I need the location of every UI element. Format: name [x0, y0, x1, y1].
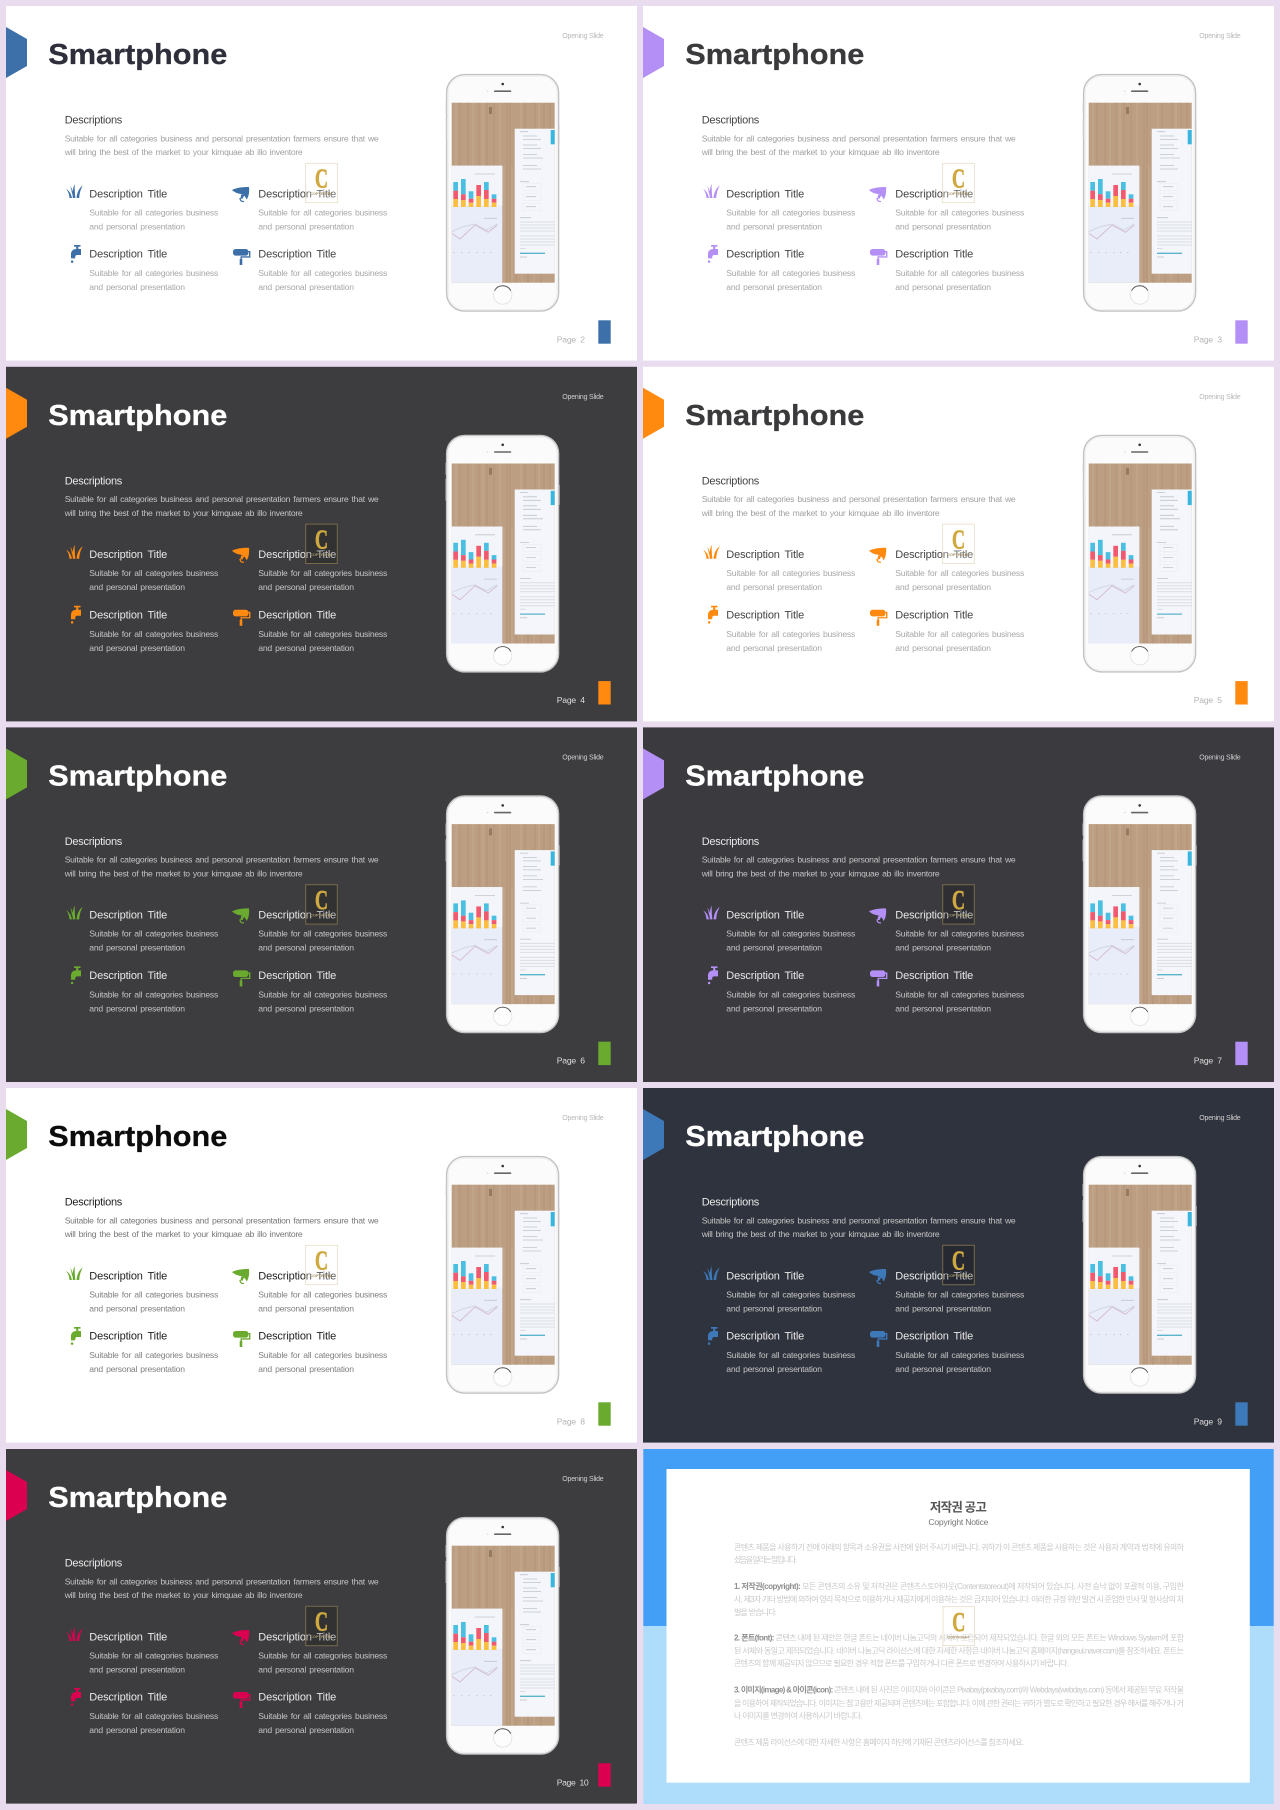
item: grass icon description: Description Title — [726, 910, 804, 922]
item: roller icon description: Suitable for all categories business — [258, 1350, 387, 1360]
copyright section 3 — [734, 1684, 1184, 1720]
page number: Page 5 — [1194, 695, 1222, 705]
item: faucet icon description — [71, 1688, 218, 1735]
page accent block — [598, 1763, 611, 1787]
descriptions block: Descriptions — [702, 1196, 760, 1208]
item: grass icon description: Suitable for all categories business — [89, 1650, 218, 1660]
item: grass icon description: and personal presentation — [726, 943, 822, 953]
item: roller icon description: and personal presentation — [258, 1364, 354, 1374]
hexagon accent — [6, 388, 27, 439]
hexagon accent — [643, 1109, 664, 1160]
descriptions block: Descriptions — [65, 114, 123, 126]
item: drill icon description — [232, 908, 387, 953]
watermark: C — [315, 1606, 328, 1636]
item: drill icon description: Suitable for all categories business — [895, 1289, 1024, 1299]
item: grass icon description — [66, 905, 218, 953]
item: faucet icon description: Description Title — [89, 1692, 167, 1704]
descriptions block: will bring the best of the market to your kimquae ab illo inventore — [64, 508, 303, 518]
panel: slide page 2, white with blue accent — [6, 6, 637, 361]
item: grass icon description: Suitable for all categories business — [726, 1289, 855, 1299]
item: faucet icon description: Suitable for all categories business — [726, 268, 855, 278]
item: drill icon description: Suitable for all categories business — [258, 1289, 387, 1299]
item: faucet icon description: Suitable for all categories business — [89, 1350, 218, 1360]
watermark: COPYRIGHT — [310, 192, 333, 196]
item: roller icon description: and personal presentation — [258, 643, 354, 653]
descriptions block: will bring the best of the market to your kimquae ab illo inventore — [701, 1229, 940, 1239]
item: grass icon description — [66, 545, 218, 592]
panel: slide page 8, white with green accent — [6, 1088, 637, 1443]
item: grass icon description: Suitable for all categories business — [89, 929, 218, 939]
item: drill icon description — [232, 1630, 387, 1674]
item: roller icon description: and personal presentation — [895, 1003, 991, 1013]
item: roller icon description: Suitable for all categories business — [258, 989, 387, 999]
item: roller icon description: Description Title — [258, 249, 336, 261]
item: faucet icon description — [708, 1327, 855, 1374]
copyright section 1: 1. 저작권(copyright): 모든 콘텐츠의 소유 및 저작권은 콘텐츠스토어아웃(Contentstoreout)에 저작되어 있습니다. 사전 승낙 없이 포괄적 이용, 구입한 — [734, 1581, 1185, 1591]
watermark — [943, 885, 974, 924]
title: Smartphone — [685, 39, 864, 71]
item: faucet icon description: Description Title — [89, 249, 167, 261]
item: roller icon description: Suitable for all categories business — [895, 989, 1024, 999]
watermark: C — [952, 885, 965, 915]
page accent block — [598, 1042, 611, 1065]
descriptions block: Descriptions — [702, 836, 760, 848]
hexagon accent — [6, 1470, 27, 1521]
copyright section 2: 콘텐츠의 함께 제공되지 않으므로 필요한 경우 적합 폰트를 구입하거나 다른 폰트로 변경하여 사용하시기 바랍니다. — [734, 1658, 1069, 1668]
panel: slide page 6, dark with green accent — [6, 727, 637, 1082]
item: grass icon description: Suitable for all categories business — [726, 929, 855, 939]
item: roller icon description: and personal presentation — [895, 643, 991, 653]
item: roller icon description — [233, 970, 387, 1013]
copyright closing note: 콘텐츠 제품 라이선스에 대한 자세한 사항은 홈페이지 하단에 기재된 콘텐츠라이선스를 참조하세요. — [734, 1737, 1024, 1747]
title: Smartphone — [48, 1482, 227, 1514]
item: drill icon description: and personal presentation — [258, 582, 354, 592]
descriptions block — [64, 1558, 379, 1600]
item: grass icon description: and personal presentation — [89, 221, 185, 231]
descriptions block: Suitable for all categories business and personal presentation farmers ensure that we — [65, 1576, 379, 1586]
item: faucet icon description: Suitable for all categories business — [89, 268, 218, 278]
item: drill icon description: Description Title — [895, 188, 973, 200]
descriptions block: Suitable for all categories business and personal presentation farmers ensure that we — [65, 494, 379, 504]
page accent block — [1235, 1042, 1248, 1065]
page number: Page 3 — [1194, 334, 1222, 344]
descriptions block: will bring the best of the market to your kimquae ab illo inventore — [701, 508, 940, 518]
copyright section 1: 벌을 받습니다. — [734, 1607, 777, 1617]
item: drill icon description: Description Title — [258, 1631, 336, 1643]
descriptions block: will bring the best of the market to your kimquae ab illo inventore — [701, 868, 940, 878]
phone mockup — [446, 435, 560, 672]
item: drill icon description: Suitable for all categories business — [258, 929, 387, 939]
item: drill icon description: Suitable for all categories business — [895, 207, 1024, 217]
item: grass icon description: and personal presentation — [89, 1303, 185, 1313]
title: Smartphone — [48, 1121, 227, 1153]
page number: Page 9 — [1194, 1416, 1222, 1426]
item: drill icon description — [869, 908, 1024, 953]
item: roller icon description — [870, 1331, 1024, 1374]
watermark — [943, 524, 974, 564]
item: roller icon description — [870, 970, 1024, 1013]
item: drill icon description: Suitable for all categories business — [895, 568, 1024, 578]
descriptions block: Descriptions — [702, 114, 760, 126]
descriptions block: Descriptions — [65, 475, 123, 487]
item: grass icon description: Description Title — [726, 549, 804, 561]
item: drill icon description — [869, 187, 1024, 231]
phone mockup — [446, 796, 560, 1032]
opening slide label: Opening Slide — [1199, 394, 1241, 401]
item: roller icon description: and personal presentation — [258, 1725, 354, 1735]
item: drill icon description: Description Title — [895, 549, 973, 561]
item: grass icon description: Description Title — [726, 188, 804, 200]
item: faucet icon description: Description Title — [89, 609, 167, 621]
page accent block — [1235, 1402, 1248, 1426]
copyright intro text — [734, 1542, 1185, 1564]
item: faucet icon description: and personal presentation — [726, 1003, 822, 1013]
item: grass icon description: and personal presentation — [89, 943, 185, 953]
copyright section 2 — [734, 1632, 1185, 1668]
watermark: COPYRIGHT — [947, 1636, 971, 1640]
item: faucet icon description: Suitable for all categories business — [726, 1350, 855, 1360]
watermark: COPYRIGHT — [310, 553, 333, 557]
opening slide label: Opening Slide — [1199, 33, 1241, 40]
watermark — [306, 885, 337, 924]
hexagon accent — [6, 27, 27, 78]
watermark: COPYRIGHT — [947, 192, 970, 196]
descriptions block — [701, 1196, 1016, 1239]
descriptions block: Suitable for all categories business and personal presentation farmers ensure that we — [702, 494, 1016, 504]
item: drill icon description: and personal presentation — [258, 1303, 354, 1313]
item: roller icon description: Description Title — [895, 1331, 973, 1343]
item: drill icon description: and personal presentation — [258, 1664, 354, 1674]
opening slide label: Opening Slide — [562, 1476, 604, 1483]
item: grass icon description: Suitable for all categories business — [726, 568, 855, 578]
item: grass icon description — [66, 184, 218, 231]
title: Smartphone — [48, 760, 227, 792]
item: faucet icon description: and personal presentation — [726, 1364, 822, 1374]
item: drill icon description: and personal presentation — [895, 943, 991, 953]
item: drill icon description — [232, 548, 387, 592]
copyright heading: 저작권 공고 — [930, 1500, 987, 1515]
watermark: C — [952, 1607, 965, 1637]
item: drill icon description: Description Title — [258, 910, 336, 922]
page number: Page 4 — [557, 695, 585, 705]
item: drill icon description: Description Title — [895, 910, 973, 922]
item: faucet icon description: and personal presentation — [726, 282, 822, 292]
item: roller icon description: Description Title — [895, 609, 973, 621]
page accent block — [598, 681, 611, 704]
opening slide label: Opening Slide — [562, 754, 604, 761]
title: Smartphone — [48, 400, 227, 432]
descriptions block: Descriptions — [65, 1196, 123, 1208]
title: Smartphone — [685, 760, 864, 792]
watermark: COPYRIGHT — [310, 1274, 333, 1278]
descriptions block: will bring the best of the market to your kimquae ab illo inventore — [64, 1590, 303, 1600]
watermark: C — [952, 524, 965, 554]
hexagon accent — [643, 748, 664, 799]
item: grass icon description: Suitable for all categories business — [89, 1289, 218, 1299]
hexagon accent — [643, 27, 664, 78]
item: faucet icon description: Suitable for all categories business — [89, 989, 218, 999]
item: grass icon description: Description Title — [726, 1270, 804, 1282]
item: faucet icon description: Suitable for all categories business — [726, 629, 855, 639]
item: roller icon description: Description Title — [258, 609, 336, 621]
item: drill icon description: Description Title — [258, 549, 336, 561]
item: drill icon description — [232, 187, 387, 231]
item: roller icon description — [233, 1331, 387, 1374]
item: grass icon description — [66, 1266, 218, 1313]
panel: copyright notice slide — [643, 1449, 1274, 1804]
watermark — [306, 163, 337, 203]
watermark: COPYRIGHT — [310, 913, 333, 917]
item: faucet icon description: Description Title — [726, 970, 804, 982]
opening slide label: Opening Slide — [1199, 1115, 1241, 1122]
descriptions block: Suitable for all categories business and personal presentation farmers ensure that we — [702, 133, 1016, 143]
item: drill icon description: Description Title — [258, 1270, 336, 1282]
item: faucet icon description: Description Title — [726, 249, 804, 261]
descriptions block — [64, 836, 379, 878]
item: roller icon description — [233, 1692, 387, 1735]
item: roller icon description — [233, 249, 387, 292]
item: drill icon description: and personal presentation — [895, 582, 991, 592]
item: faucet icon description — [71, 1327, 218, 1374]
page number: Page 2 — [557, 334, 585, 344]
hexagon accent — [643, 388, 664, 439]
watermark: C — [315, 1246, 328, 1276]
item: faucet icon description: and personal presentation — [89, 1364, 185, 1374]
panel: slide page 9, navy with blue accent — [643, 1088, 1274, 1443]
item: roller icon description: Description Title — [258, 970, 336, 982]
phone mockup — [446, 1518, 560, 1754]
item: grass icon description: Description Title — [89, 188, 167, 200]
item: roller icon description: Description Title — [258, 1692, 336, 1704]
item: faucet icon description: Suitable for all categories business — [89, 629, 218, 639]
panel: slide page 5, white with orange accent — [643, 367, 1274, 721]
item: faucet icon description: Description Title — [89, 1331, 167, 1343]
item: roller icon description: Suitable for all categories business — [258, 1711, 387, 1721]
panel: slide page 3, white with purple accent — [643, 6, 1274, 361]
copyright section 3: 3. 이미지(image) & 아이콘(icon): 콘텐츠 내에 된 사진은 이미지와 아이콘은 Pixabay(pixabay.com)와 Webdays(webdays.com) 등에서 제공된 무료 저작물 — [734, 1684, 1184, 1694]
item: roller icon description — [233, 610, 387, 653]
item: roller icon description: Description Title — [895, 249, 973, 261]
item: drill icon description — [232, 1269, 387, 1313]
copyright section 1 — [734, 1581, 1185, 1617]
item: faucet icon description: and personal presentation — [89, 1003, 185, 1013]
descriptions block — [701, 475, 1016, 518]
opening slide label: Opening Slide — [562, 33, 604, 40]
watermark — [943, 1607, 974, 1646]
item: grass icon description — [703, 184, 855, 231]
watermark: C — [952, 1246, 965, 1276]
descriptions block — [64, 1196, 379, 1239]
descriptions block: Descriptions — [65, 1558, 123, 1570]
copyright intro text: 셨음을 알리는 말입니다. — [734, 1554, 797, 1564]
item: faucet icon description: Suitable for all categories business — [726, 989, 855, 999]
phone mockup — [1083, 796, 1197, 1032]
descriptions block: will bring the best of the market to your kimquae ab illo inventore — [64, 868, 303, 878]
panel: slide page 7, dark with purple accent — [643, 727, 1274, 1082]
item: drill icon description — [869, 548, 1024, 592]
watermark: COPYRIGHT — [947, 913, 970, 917]
descriptions block: Descriptions — [702, 475, 760, 487]
item: faucet icon description: Description Title — [726, 1331, 804, 1343]
watermark: COPYRIGHT — [947, 1274, 970, 1278]
item: grass icon description: and personal presentation — [726, 221, 822, 231]
descriptions block: Suitable for all categories business and personal presentation farmers ensure that we — [65, 1215, 379, 1225]
descriptions block: Suitable for all categories business and personal presentation farmers ensure that we — [702, 1215, 1016, 1225]
phone mockup — [1083, 1157, 1197, 1393]
item: drill icon description: Suitable for all categories business — [258, 568, 387, 578]
title: Smartphone — [685, 400, 864, 432]
copyright subheading: Copyright Notice — [928, 1517, 989, 1527]
item: grass icon description: Description Title — [89, 910, 167, 922]
item: roller icon description: and personal presentation — [258, 282, 354, 292]
item: drill icon description — [869, 1269, 1024, 1313]
opening slide label: Opening Slide — [562, 394, 604, 401]
item: drill icon description: Description Title — [258, 188, 336, 200]
descriptions block: Suitable for all categories business and personal presentation farmers ensure that we — [65, 855, 379, 865]
item: faucet icon description — [708, 245, 855, 292]
item: faucet icon description — [71, 966, 218, 1013]
item: drill icon description: and personal presentation — [895, 1303, 991, 1313]
item: roller icon description — [870, 610, 1024, 653]
page number: Page 6 — [557, 1056, 585, 1066]
item: grass icon description: and personal presentation — [89, 1664, 185, 1674]
item: drill icon description: and personal presentation — [258, 221, 354, 231]
item: roller icon description: and personal presentation — [258, 1003, 354, 1013]
watermark — [306, 524, 337, 564]
item: grass icon description — [703, 1266, 855, 1313]
item: faucet icon description — [708, 606, 855, 653]
page accent block — [598, 1402, 611, 1426]
descriptions block: Suitable for all categories business and personal presentation farmers ensure that we — [65, 133, 379, 143]
item: grass icon description: Description Title — [89, 549, 167, 561]
phone mockup — [1083, 75, 1197, 311]
hexagon accent — [6, 748, 27, 799]
item: roller icon description: and personal presentation — [895, 1364, 991, 1374]
item: faucet icon description — [708, 966, 855, 1013]
page accent block — [1235, 681, 1248, 704]
item: roller icon description: Description Title — [895, 970, 973, 982]
item: grass icon description: Suitable for all categories business — [89, 207, 218, 217]
item: faucet icon description — [71, 245, 218, 292]
descriptions block — [701, 114, 1016, 157]
copyright section 2: 2. 폰트(font): 콘텐츠 내에 된 제안은 한글 폰트는 네이버 나눔고딕의 서체와 포함되어 제작되었습니다. 한글 외의 모든 폰트는 Windows System에 포함 — [734, 1632, 1185, 1642]
item: roller icon description: Suitable for all categories business — [895, 629, 1024, 639]
descriptions block — [64, 114, 379, 157]
item: grass icon description: and personal presentation — [89, 582, 185, 592]
watermark: C — [315, 885, 328, 915]
copyright intro text: 콘텐츠 제품을 사용하기 전에 아래의 항목과 소유권을 사전에 읽어 주시기 바랍니다. 귀하가 이 콘텐츠 제품을 사용하는 것은 사용자 계약과 법적에 유의하 — [734, 1542, 1185, 1552]
copyright section 3: 나 이미지를 변경하여 사용하시기 바랍니다. — [734, 1710, 863, 1720]
item: drill icon description: Suitable for all categories business — [895, 929, 1024, 939]
descriptions block: will bring the best of the market to your kimquae ab illo inventore — [64, 1229, 303, 1239]
item: grass icon description: and personal presentation — [726, 582, 822, 592]
item: grass icon description — [703, 545, 855, 592]
watermark — [943, 163, 974, 203]
opening slide label: Opening Slide — [1199, 754, 1241, 761]
copyright section 2: 된 서체와 동일고 제작되었습니다. 네이버 나눔고딕 라이선스에 대한 자세한 사항은 네이버 나눔고딕 홈페이지(hangeul.naver.com)를 참조하세요. 폰트는 — [734, 1646, 1184, 1656]
item: drill icon description: Suitable for all categories business — [258, 207, 387, 217]
item: grass icon description: Description Title — [89, 1270, 167, 1282]
copyright section 1: 사, 제3자 기타 방법에 의하여 영리 목적으로 이용하거나 제공자에게 이용하는 것은 금지되어 있습니다. 이러한 규정 위반 발견 시 준엄한 민사 및 형사상의 처 — [734, 1594, 1184, 1604]
item: roller icon description: Suitable for all categories business — [895, 268, 1024, 278]
watermark: COPYRIGHT — [310, 1635, 333, 1639]
item: faucet icon description: Description Title — [726, 609, 804, 621]
panel: slide page 10, dark with crimson accent — [6, 1449, 637, 1804]
phone mockup — [446, 1157, 560, 1393]
copyright section 3: 을 이용하여 제작되었습니다. 이미지는 참고용만 제공되며 콘텐츠에는 포함합니다. 이에 관한 권리는 귀하가 별도로 확인하고 필요한 경우 해서를 해주거나 거 — [734, 1698, 1184, 1708]
item: drill icon description: Suitable for all categories business — [258, 1650, 387, 1660]
title: Smartphone — [48, 39, 227, 71]
watermark — [306, 1245, 337, 1285]
item: grass icon description — [703, 905, 855, 953]
descriptions block: Descriptions — [65, 836, 123, 848]
item: roller icon description: Description Title — [258, 1331, 336, 1343]
descriptions block — [701, 836, 1016, 878]
item: faucet icon description: and personal presentation — [726, 643, 822, 653]
item: grass icon description: Suitable for all categories business — [726, 207, 855, 217]
watermark — [306, 1606, 337, 1646]
watermark: C — [952, 164, 965, 194]
item: roller icon description: Suitable for all categories business — [258, 268, 387, 278]
watermark — [943, 1245, 974, 1285]
item: faucet icon description: and personal presentation — [89, 282, 185, 292]
opening slide label: Opening Slide — [562, 1115, 604, 1122]
item: drill icon description: Description Title — [895, 1270, 973, 1282]
descriptions block — [64, 475, 379, 518]
item: roller icon description — [870, 249, 1024, 292]
item: roller icon description: and personal presentation — [895, 282, 991, 292]
phone mockup — [1083, 435, 1197, 672]
item: drill icon description: and personal presentation — [258, 943, 354, 953]
item: faucet icon description: and personal presentation — [89, 643, 185, 653]
item: grass icon description: Description Title — [89, 1631, 167, 1643]
page accent block — [598, 320, 611, 344]
hexagon accent — [6, 1109, 27, 1160]
phone mockup — [446, 75, 560, 311]
descriptions block: will bring the best of the market to your kimquae ab illo inventore — [64, 147, 303, 157]
page number: Page 8 — [557, 1416, 585, 1426]
item: faucet icon description — [71, 606, 218, 653]
item: faucet icon description: and personal presentation — [89, 1725, 185, 1735]
item: roller icon description: Suitable for all categories business — [895, 1350, 1024, 1360]
item: roller icon description: Suitable for all categories business — [258, 629, 387, 639]
page accent block — [1235, 320, 1248, 344]
watermark: COPYRIGHT — [947, 553, 970, 557]
title: Smartphone — [685, 1121, 864, 1153]
descriptions block: will bring the best of the market to your kimquae ab illo inventore — [701, 147, 940, 157]
item: faucet icon description: Description Title — [89, 970, 167, 982]
page number: Page 7 — [1194, 1056, 1222, 1066]
item: grass icon description: and personal presentation — [726, 1303, 822, 1313]
page number: Page 10 — [557, 1777, 589, 1787]
panel: slide page 4, dark with orange accent — [6, 367, 637, 721]
watermark: C — [315, 164, 328, 194]
item: grass icon description: Suitable for all categories business — [89, 568, 218, 578]
item: faucet icon description: Suitable for all categories business — [89, 1711, 218, 1721]
item: grass icon description — [66, 1627, 218, 1674]
item: drill icon description: and personal presentation — [895, 221, 991, 231]
descriptions block: Suitable for all categories business and personal presentation farmers ensure that we — [702, 855, 1016, 865]
watermark: C — [315, 524, 328, 554]
